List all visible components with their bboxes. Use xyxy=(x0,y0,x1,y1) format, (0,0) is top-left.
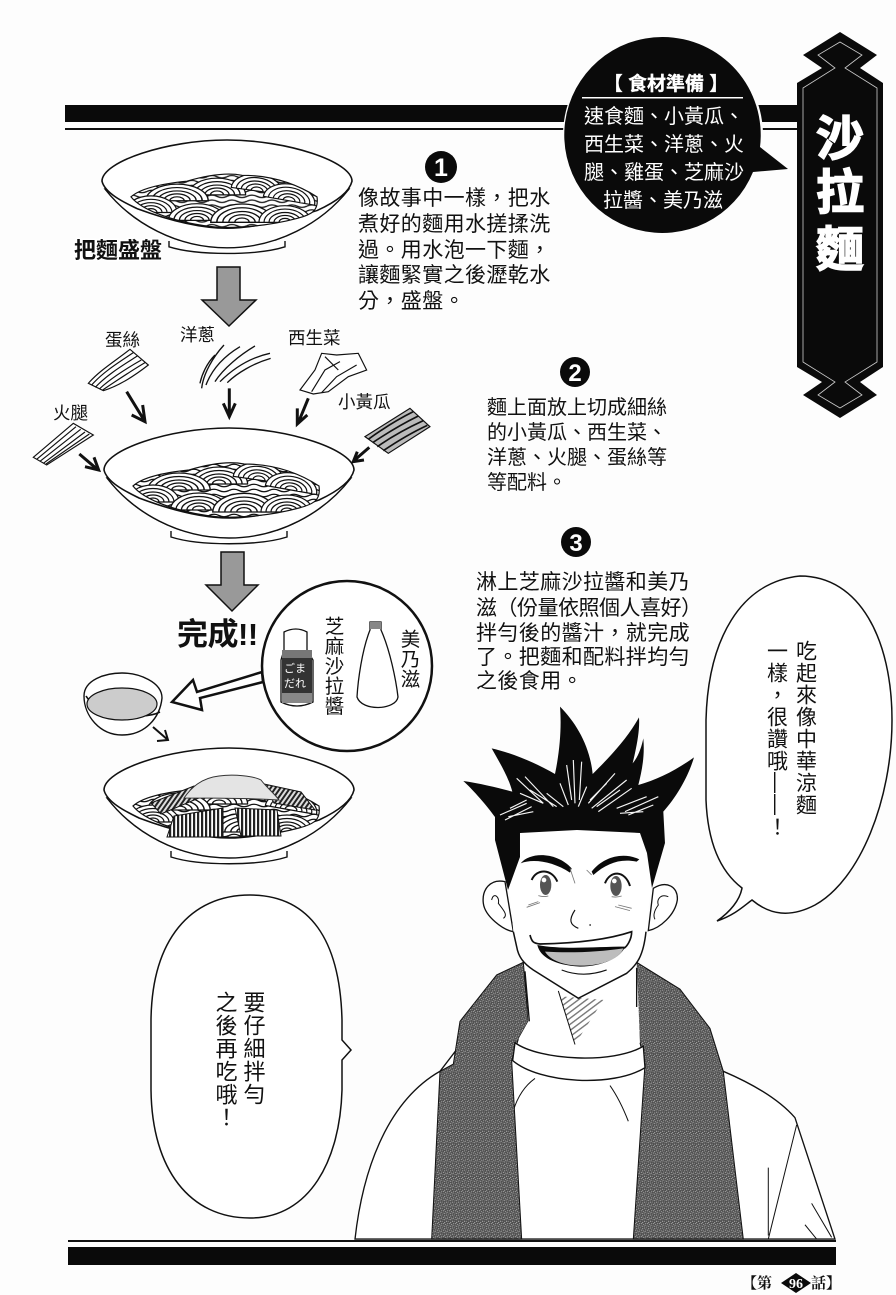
arrow down 2 xyxy=(206,552,258,611)
hair highlights xyxy=(500,760,658,820)
page label: 第96話: 【第 xyxy=(742,1274,772,1292)
shirt xyxy=(355,962,835,1239)
step 1 text: 分，盛盤。 xyxy=(358,290,465,313)
label: mayonnaise: 美乃滋 xyxy=(397,629,420,689)
ingredients list: 拉醬、美乃滋 xyxy=(603,189,723,212)
speech bubble left xyxy=(151,895,351,1218)
ingredients list: 腿、雞蛋、芝麻沙 xyxy=(584,161,744,184)
title text: 拉 xyxy=(816,167,864,220)
sesame dressing bottle: ごま xyxy=(284,661,306,675)
step 1 number: 1 xyxy=(434,154,448,182)
inset circle: sauces xyxy=(262,581,432,751)
ingredient: egg strips xyxy=(88,349,148,391)
ingredient labels: 火腿 xyxy=(53,403,88,423)
nose xyxy=(571,910,591,928)
ears xyxy=(483,881,677,932)
header rule xyxy=(65,105,797,130)
speech bubble right xyxy=(706,576,892,921)
character: smiling boy with towel xyxy=(355,707,835,1239)
mayonnaise bottle xyxy=(357,622,398,708)
sesame dressing bottle xyxy=(281,629,313,706)
ingredient labels xyxy=(53,325,390,423)
footer rule xyxy=(68,1240,836,1265)
step 1 text: 讓麵緊實之後瀝乾水 xyxy=(358,264,551,287)
small arrows to bowl xyxy=(79,388,369,470)
head xyxy=(483,830,677,998)
title banner: 沙拉麵 xyxy=(797,32,883,418)
speech text left: 之後再吃哦！ xyxy=(212,991,238,1129)
hair xyxy=(463,707,694,890)
step 3 text: 了。把麵和配料拌均勻 xyxy=(476,646,690,669)
step 3 text: 拌勻後的醬汁，就完成 xyxy=(476,622,690,645)
step 2 text xyxy=(487,396,667,494)
step 3 text: 淋上芝麻沙拉醬和美乃 xyxy=(476,571,690,594)
step 1 text xyxy=(358,187,551,313)
ingredient: cucumber xyxy=(365,408,430,453)
face xyxy=(508,830,652,998)
step 3 text xyxy=(476,571,702,693)
sesame dressing bottle: だれ xyxy=(284,677,306,690)
title text: 沙 xyxy=(816,113,864,166)
neck and collar xyxy=(513,961,645,1080)
title text xyxy=(816,113,864,277)
step 1 number xyxy=(425,151,457,183)
step 2 text: 的小黃瓜、西生菜、 xyxy=(487,421,667,444)
step 1 text: 像故事中一樣，把水 xyxy=(358,187,551,210)
ingredient labels: 小黃瓜 xyxy=(338,392,390,412)
ingredients and arrows xyxy=(33,345,430,470)
mouth xyxy=(530,932,632,974)
step 3 text: 滋（份量依照個人喜好） xyxy=(476,597,702,620)
page label: 第96話: 96 xyxy=(789,1277,803,1292)
step 2 number: 2 xyxy=(568,360,582,387)
page label: 第96話: 話】 xyxy=(811,1275,841,1292)
ingredient labels: 蛋絲 xyxy=(105,330,140,350)
step 1 text: 煮好的麵用水搓揉洗 xyxy=(358,213,551,236)
ingredient labels: 西生菜 xyxy=(288,328,340,348)
speech text right: 一樣，很讚哦——！ xyxy=(764,640,788,838)
ingredients list: 西生菜、洋蔥、火 xyxy=(584,133,744,156)
ingredient labels: 洋蔥 xyxy=(180,325,215,345)
bowl with toppings, step 2 xyxy=(104,428,354,544)
step 2 text: 洋蔥、火腿、蛋絲等 xyxy=(487,446,667,469)
speech text right xyxy=(764,640,817,838)
step 2 text: 麵上面放上切成細絲 xyxy=(487,396,667,419)
small arrow to final bowl xyxy=(153,727,168,741)
title text: 麵 xyxy=(816,224,864,277)
page label: 第96話 xyxy=(742,1273,841,1293)
speech text left: 要仔細拌勻 xyxy=(240,991,266,1106)
hollow arrow from sauces to bowl xyxy=(172,672,263,710)
ingredients list: 速食麵、小黃瓜、 xyxy=(584,105,744,128)
sauce bowl xyxy=(84,673,162,735)
jaw line xyxy=(513,932,646,998)
arrow down 1 xyxy=(202,267,256,326)
label: sesame dressing: 芝麻沙拉醬 xyxy=(321,616,344,716)
ingredient: ham xyxy=(33,423,93,465)
step 3 number xyxy=(561,527,591,557)
towel xyxy=(432,962,743,1239)
eyes xyxy=(527,868,632,911)
ingredient: onion xyxy=(200,345,271,388)
step 2 number xyxy=(560,357,590,387)
finished bowl xyxy=(104,748,354,864)
bowl of noodles, step 1 xyxy=(102,140,352,253)
ingredients heading: 【 食材準備 】 xyxy=(604,72,728,95)
ingredient: lettuce xyxy=(300,353,367,394)
speech text right: 吃起來像中華涼麵 xyxy=(794,640,817,816)
step 2 text: 等配料。 xyxy=(487,471,567,494)
ingredients list xyxy=(584,105,744,212)
eyebrows xyxy=(521,855,639,875)
speech text left xyxy=(212,991,266,1129)
step 3 number: 3 xyxy=(569,530,583,557)
label: 完成!!: 完成!! xyxy=(177,617,258,652)
ingredients speech bubble xyxy=(563,35,788,235)
label: 把麵盛盤: 把麵盛盤 xyxy=(74,238,162,263)
body, towel and collar xyxy=(355,961,835,1239)
step 1 text: 過。用水泡一下麵， xyxy=(358,239,551,262)
step 3 text: 之後食用。 xyxy=(476,670,583,693)
